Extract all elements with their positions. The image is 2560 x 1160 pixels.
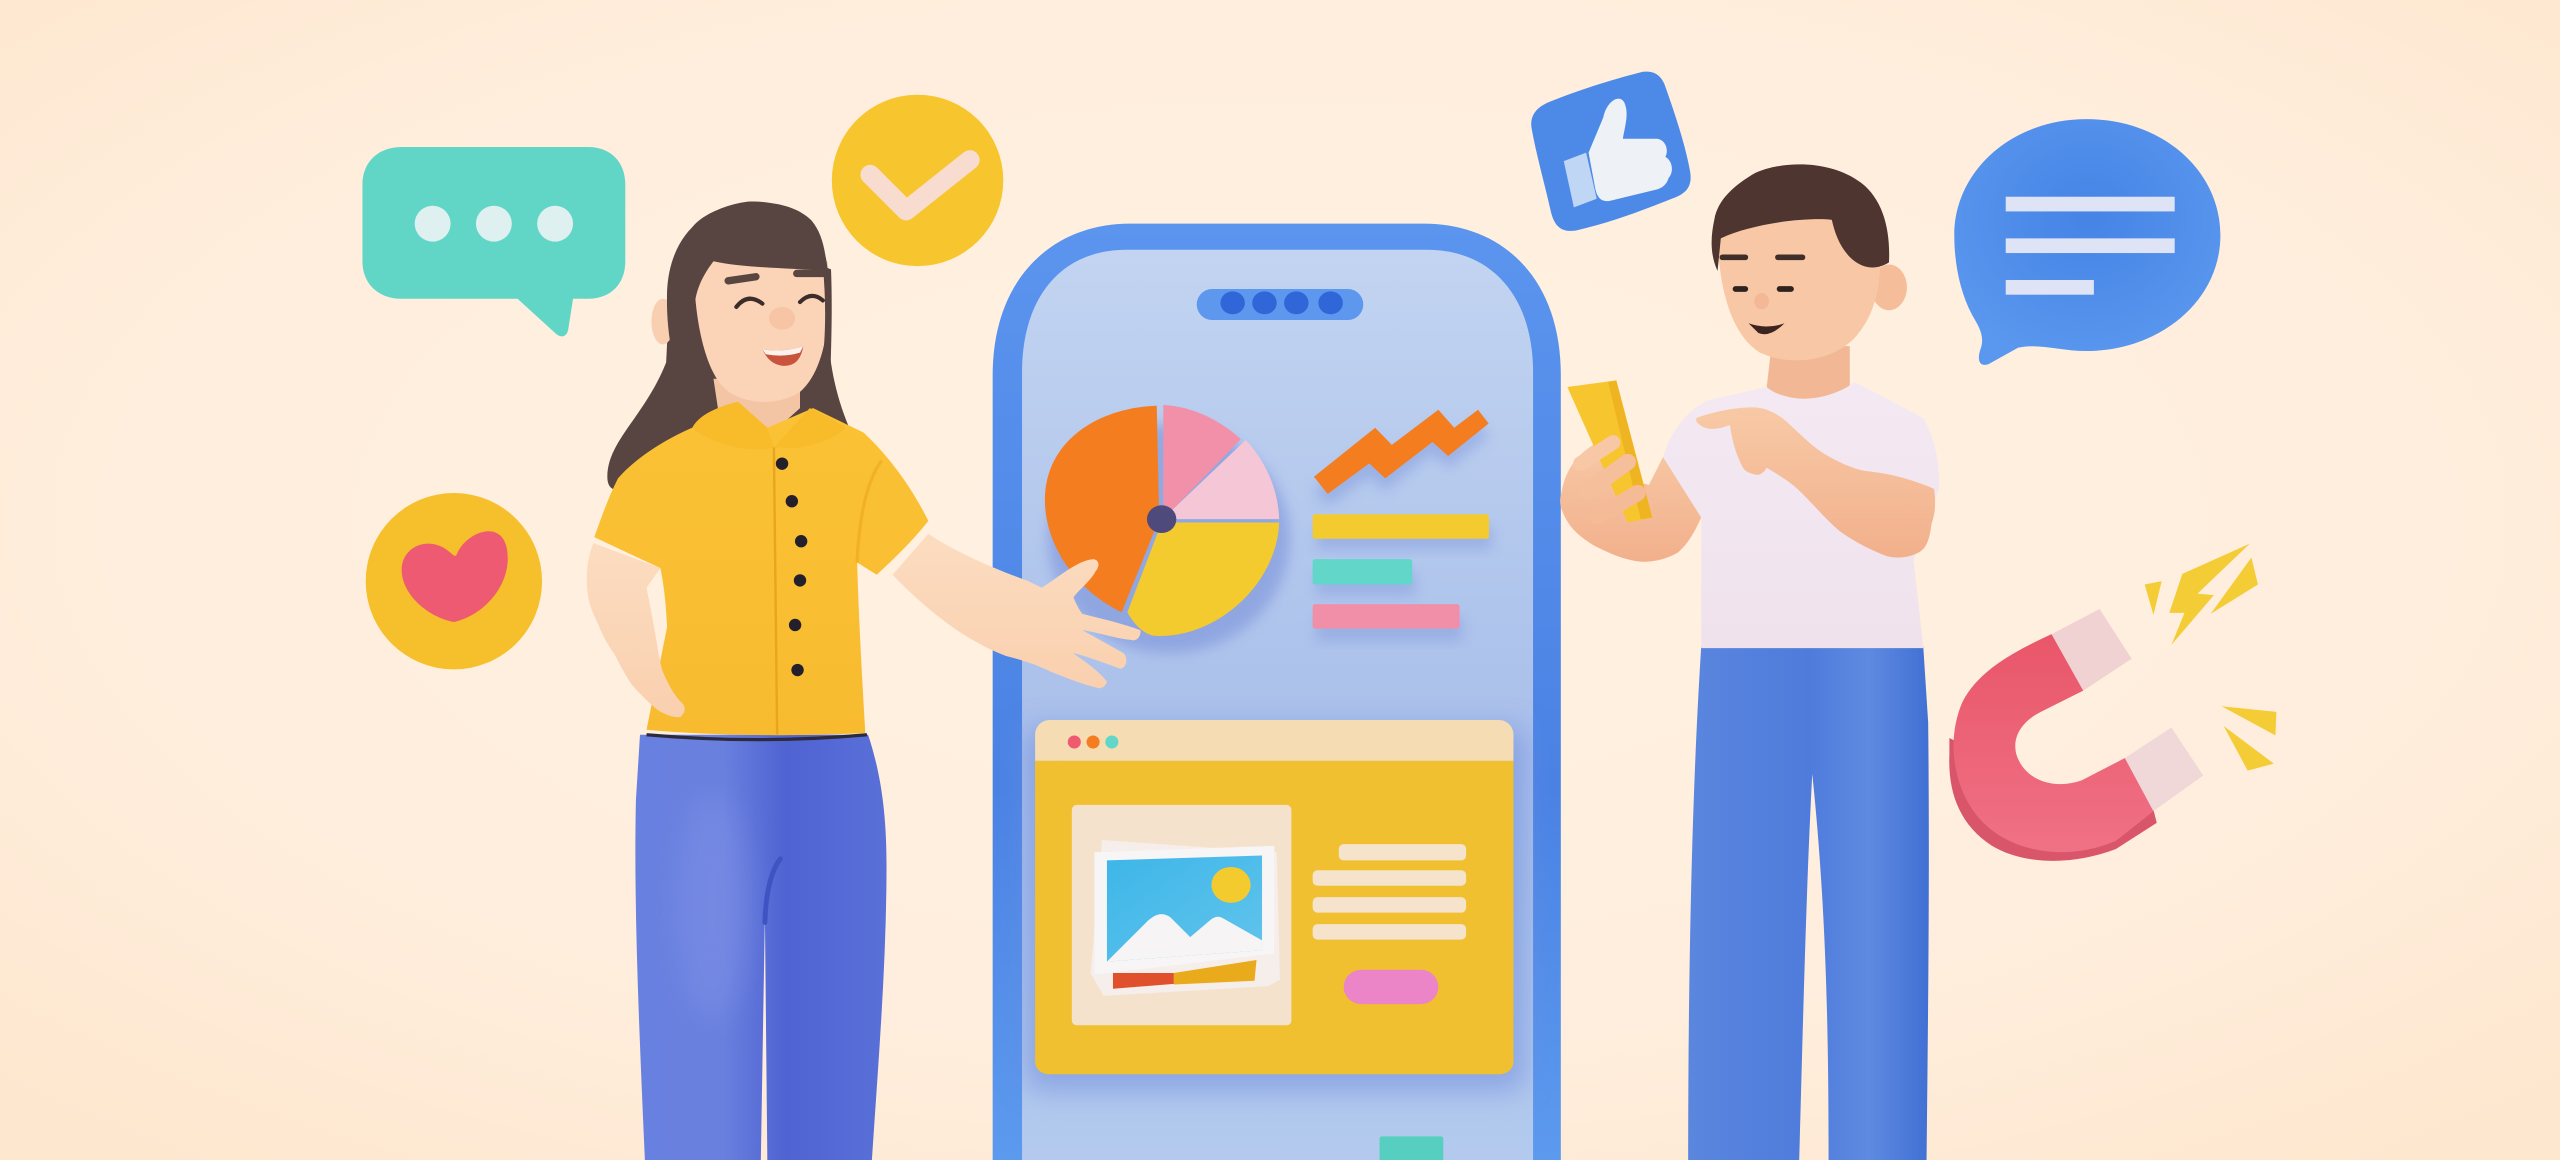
hair	[1712, 164, 1889, 271]
phone	[993, 224, 1561, 1160]
pants highlight	[676, 792, 748, 1020]
heart badge	[366, 493, 542, 669]
image card	[1072, 805, 1291, 1025]
neck	[713, 379, 800, 438]
white t-shirt	[1663, 382, 1939, 648]
facial features	[728, 273, 823, 366]
left arm and hand	[587, 543, 685, 717]
like icon	[1531, 72, 1691, 231]
pants crease	[765, 859, 780, 922]
browser window	[1025, 720, 1525, 1091]
ear	[651, 299, 674, 344]
magnet edge	[1949, 738, 2157, 861]
text lines	[1313, 844, 1466, 940]
lightning sparks	[2145, 544, 2276, 771]
back hair	[607, 202, 851, 490]
yellow shirt	[594, 402, 928, 735]
neck	[1767, 346, 1850, 399]
phone frame	[993, 224, 1561, 1160]
phone notch	[1197, 289, 1363, 320]
check badge	[832, 95, 1003, 266]
pink button	[1344, 970, 1438, 1004]
magnet body	[1954, 634, 2153, 852]
pie chart	[1045, 405, 1290, 653]
collar	[692, 402, 774, 449]
teal block on phone	[1380, 1136, 1443, 1160]
phone screen	[1022, 250, 1533, 1160]
line chart	[1314, 410, 1489, 506]
hair front	[667, 201, 828, 390]
woman	[587, 201, 1140, 1160]
face	[694, 258, 829, 402]
face	[1718, 212, 1880, 360]
blue speech bubble	[1954, 119, 2220, 365]
facial features	[1722, 257, 1802, 334]
pants	[635, 735, 887, 1160]
sleeve shading	[857, 460, 882, 562]
magnet tips	[2052, 609, 2203, 811]
pants	[1688, 647, 1929, 1160]
shirt buttons	[776, 457, 807, 676]
thumb	[1564, 99, 1672, 207]
right arm	[893, 534, 1140, 688]
chart bars	[1313, 514, 1492, 642]
ear	[1871, 264, 1907, 310]
pointing arm	[1696, 407, 1935, 558]
magnet	[1949, 544, 2276, 861]
placket	[774, 447, 777, 735]
man	[1560, 164, 1939, 1160]
waist shadow	[647, 735, 867, 740]
holding fingers	[1580, 442, 1638, 516]
yellow phone	[1567, 380, 1652, 522]
holding arm	[1560, 436, 1701, 562]
teal chat bubble	[362, 147, 625, 336]
